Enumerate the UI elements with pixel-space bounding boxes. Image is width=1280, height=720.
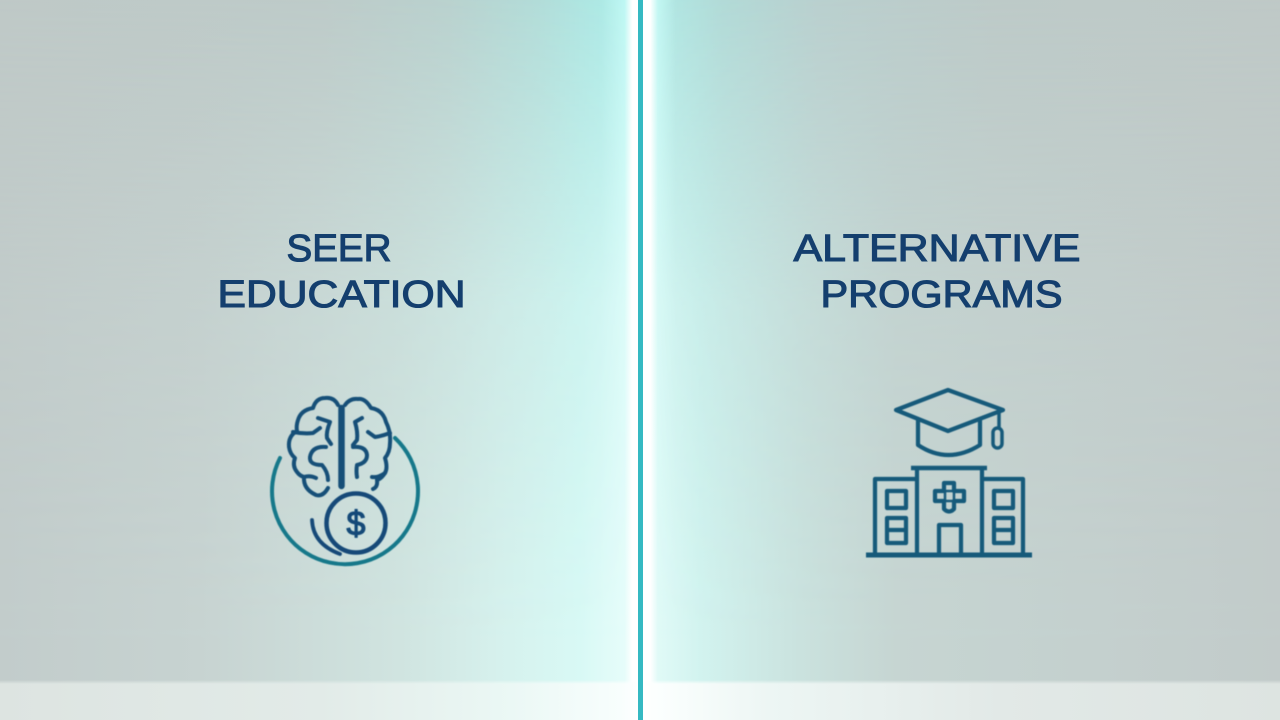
- hospital building: [866, 468, 1032, 555]
- heading: Alternative Programs: PROGRAMS: [820, 274, 1062, 316]
- icon: brain with dollar coin: [272, 398, 418, 564]
- heading: Seer Education: EDUCATION: [218, 274, 466, 316]
- brain: [289, 398, 390, 495]
- medical cross: [935, 483, 964, 512]
- icon: brain with dollar coin: $: [347, 505, 366, 543]
- icon: graduation cap over hospital: [866, 390, 1032, 555]
- graduation cap: [896, 390, 1003, 455]
- heading: Alternative Programs: ALTERNATIVE: [794, 228, 1080, 270]
- heading: Seer Education: [218, 228, 466, 316]
- outer ring: [272, 438, 418, 564]
- heading: Seer Education: SEER: [286, 228, 392, 270]
- heading: Alternative Programs: [794, 228, 1080, 316]
- dollar coin: [326, 494, 386, 552]
- glowing centre divider: [638, 0, 643, 720]
